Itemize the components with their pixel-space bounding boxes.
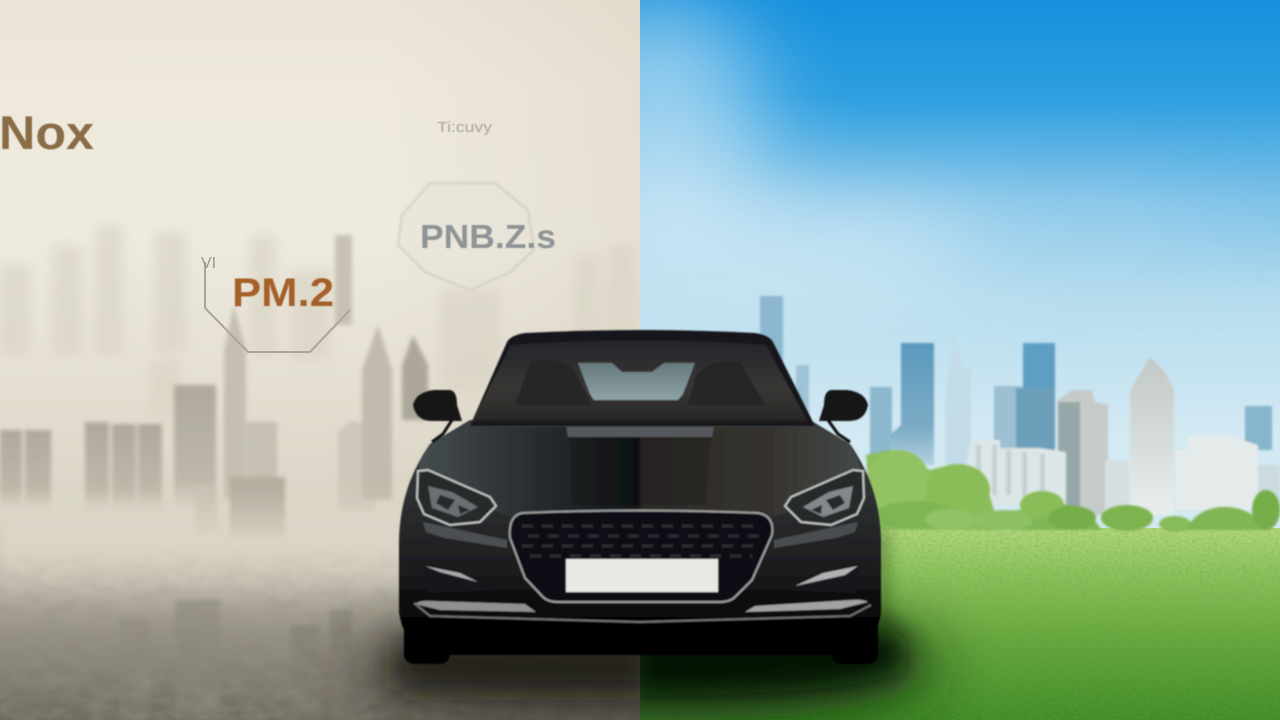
car body	[399, 420, 881, 655]
grass texture	[704, 528, 1280, 720]
hood centre panel	[566, 427, 714, 505]
mirror mounts and fender lines	[432, 420, 850, 442]
badge: PM.2 octagon: PM.2	[232, 271, 334, 315]
clear blue sky	[640, 0, 1280, 540]
clouds	[640, 0, 1156, 319]
label: small faint caption: Ti:cuvy	[437, 119, 493, 136]
clean skyline	[760, 296, 1280, 515]
grille	[510, 510, 772, 602]
label: NOx: Nox	[0, 106, 94, 159]
roof and pillars	[470, 330, 815, 426]
ground fog	[0, 502, 399, 590]
grass field	[640, 528, 1280, 720]
car shadow right	[640, 526, 969, 720]
car shadow left	[324, 596, 640, 720]
panel: polluted side	[0, 0, 640, 720]
headlights	[417, 470, 864, 525]
hazy city towers	[0, 235, 428, 537]
license plate	[566, 559, 718, 592]
seats	[515, 360, 765, 405]
polluted sky	[0, 0, 640, 720]
bumper trim	[415, 601, 536, 612]
panel: clean side	[420, 0, 1280, 720]
windshield reflection	[578, 363, 695, 400]
car	[399, 330, 881, 664]
badge: PNB 2.5 octagon: PNB.Z.s	[420, 218, 556, 255]
badge: PM.2 octagon: VI	[201, 255, 216, 272]
badge: PM.2 octagon	[201, 255, 350, 352]
fog lights	[423, 563, 494, 593]
badge: PNB 2.5 octagon	[398, 183, 556, 290]
windshield	[472, 340, 808, 426]
mirrors	[413, 390, 462, 421]
foreground city towers	[120, 600, 352, 720]
mottled city texture	[0, 581, 619, 720]
lower face trim	[423, 522, 507, 548]
hood	[420, 427, 861, 517]
tyres	[404, 610, 450, 664]
trees and hedges	[866, 450, 1280, 532]
grille mesh	[522, 526, 762, 556]
distant smog skyline	[0, 224, 628, 386]
